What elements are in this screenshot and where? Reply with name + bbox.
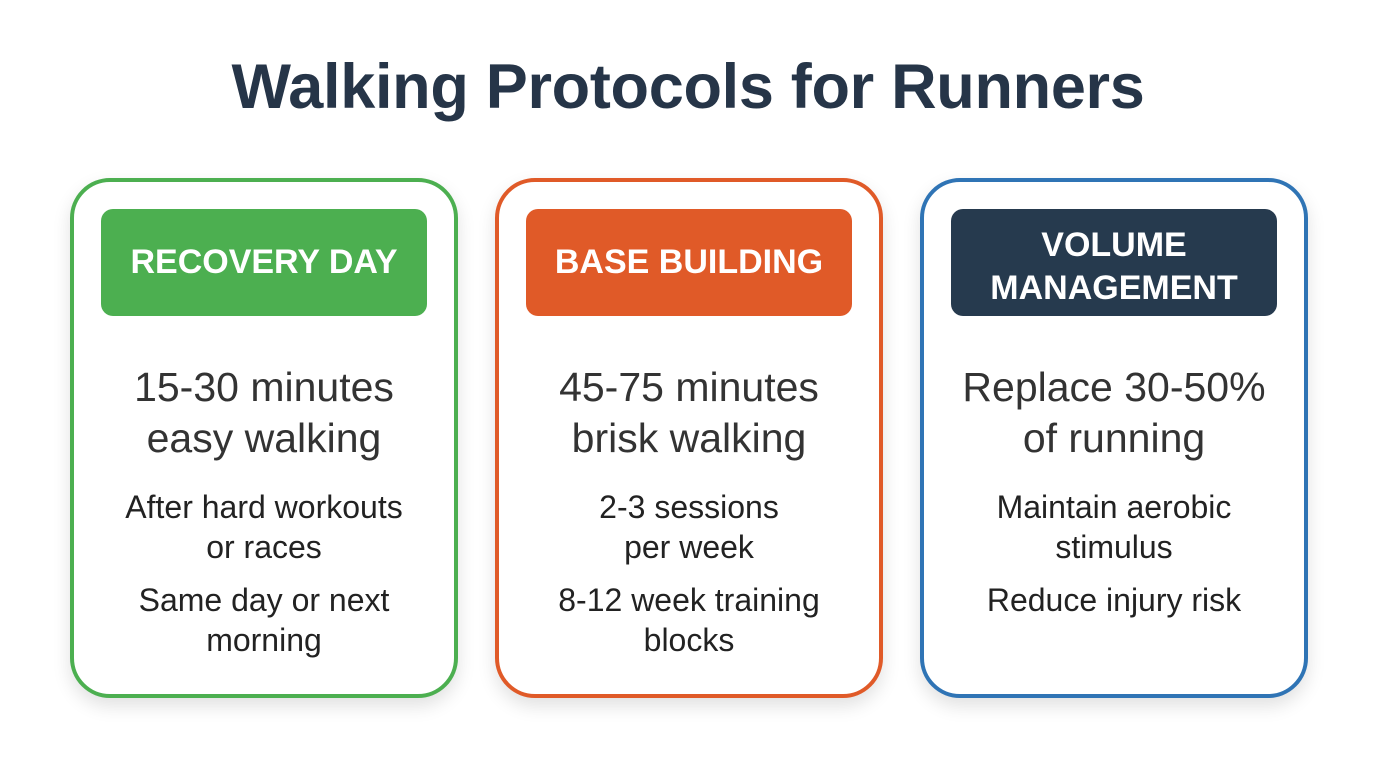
main text: base: 45-75 minutes [559,364,819,410]
badge: volume management: VOLUME [1041,226,1187,264]
main text: recovery: 15-30 minutes [134,364,394,410]
title: Walking Protocols for Runners [231,52,1145,122]
sub text: timing: After hard workouts [125,489,403,525]
panel: recovery day [70,178,458,698]
badge: base building [526,209,852,316]
sub text: blocks: 8-12 week training [558,582,820,618]
main text: base [559,364,819,461]
sub text: injury: Reduce injury risk [987,582,1241,618]
panel: volume management [920,178,1308,698]
sub text: sessions [599,489,779,565]
sub text: sessions: per week [624,529,754,565]
sub text: when: morning [206,622,322,658]
main text: volume [962,364,1266,461]
main text: recovery [134,364,394,461]
sub text: timing: or races [206,529,322,565]
sub text: aerobic [997,489,1231,565]
badge: base building: BASE BUILDING [555,243,823,281]
main text: base: brisk walking [572,415,806,461]
sub text: timing [125,489,403,565]
badge: volume management [951,209,1277,316]
sub text: when [139,582,390,658]
sub text: aerobic: Maintain aerobic [997,489,1231,525]
sub text: sessions: 2-3 sessions [599,489,779,525]
badge: volume management: MANAGEMENT [990,268,1238,306]
main text: volume: Replace 30-50% [962,364,1266,410]
sub text: blocks [558,582,820,658]
sub text: aerobic: stimulus [1055,529,1173,565]
sub text: when: Same day or next [139,582,389,618]
badge: recovery day: RECOVERY DAY [130,243,398,281]
main text: recovery: easy walking [147,415,381,461]
badge: recovery day [101,209,427,316]
main text: volume: of running [1023,415,1205,461]
panel: base building [495,178,883,698]
sub text: blocks: blocks [644,622,734,658]
